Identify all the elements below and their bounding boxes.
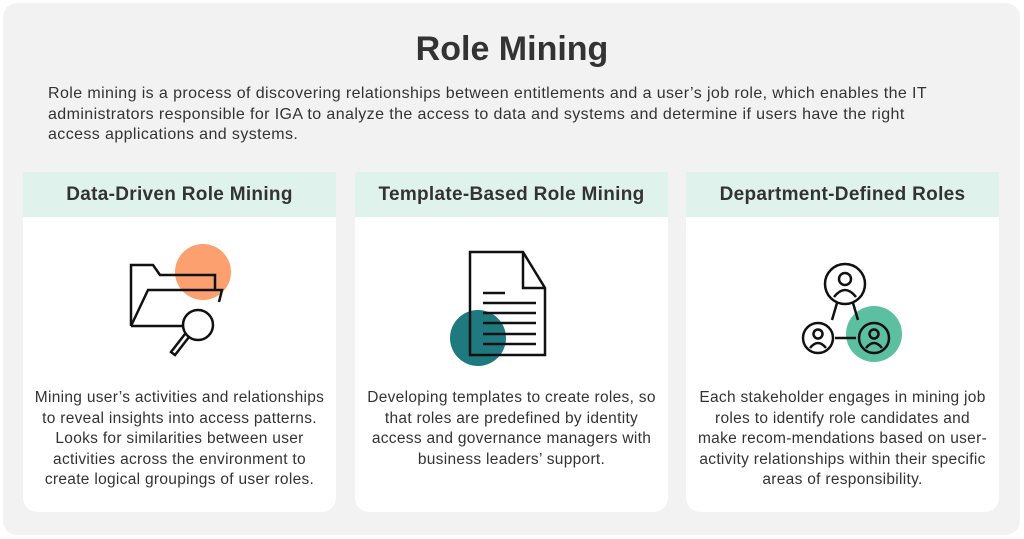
panel: data-driven — [23, 172, 336, 512]
body text: activities across the environment to — [53, 450, 306, 468]
intro text: administrators responsible for IGA to analyze the access to data and systems and determine if users have the right — [48, 106, 905, 122]
heading: Template-Based Role Mining — [378, 184, 645, 205]
icon: people network — [802, 262, 902, 362]
body text: that roles are predefined by identity — [385, 410, 638, 426]
body text: roles to identify role candidates and — [715, 410, 970, 426]
intro text: Role mining is a process of discovering relationships between entitlements and a user’s job role, which enables the IT — [48, 85, 927, 102]
title: Role Mining — [416, 30, 608, 68]
heading — [23, 172, 336, 217]
intro text — [48, 85, 927, 143]
body text — [698, 389, 987, 488]
body text: to reveal insights into access patterns. — [42, 410, 317, 426]
body text — [35, 389, 324, 488]
body text: Developing templates to create roles, so — [367, 389, 656, 406]
body text: create logical groupings of user roles. — [45, 471, 314, 488]
body text: make recom-mendations based on user- — [698, 430, 987, 447]
heading: Department-Defined Roles — [720, 184, 965, 205]
body text: areas of responsibility. — [762, 471, 923, 488]
icon: document — [450, 250, 546, 366]
body text: business leaders’ support. — [418, 450, 605, 468]
intro text: access applications and systems. — [48, 126, 298, 143]
heading — [355, 172, 668, 217]
body text — [367, 389, 656, 468]
heading: Data-Driven Role Mining — [66, 184, 293, 205]
body text: Mining user’s activities and relationships — [35, 389, 324, 406]
panel: department-defined — [686, 172, 999, 512]
body text: access and governance managers with — [372, 430, 651, 447]
body text: Each stakeholder engages in mining job — [699, 389, 986, 406]
body text: Looks for similarities between user — [55, 430, 304, 447]
body text: activity relationships within their specific — [699, 450, 986, 468]
heading — [686, 172, 999, 217]
panel: template-based — [355, 172, 668, 512]
icon: folder with magnifier — [130, 244, 231, 357]
